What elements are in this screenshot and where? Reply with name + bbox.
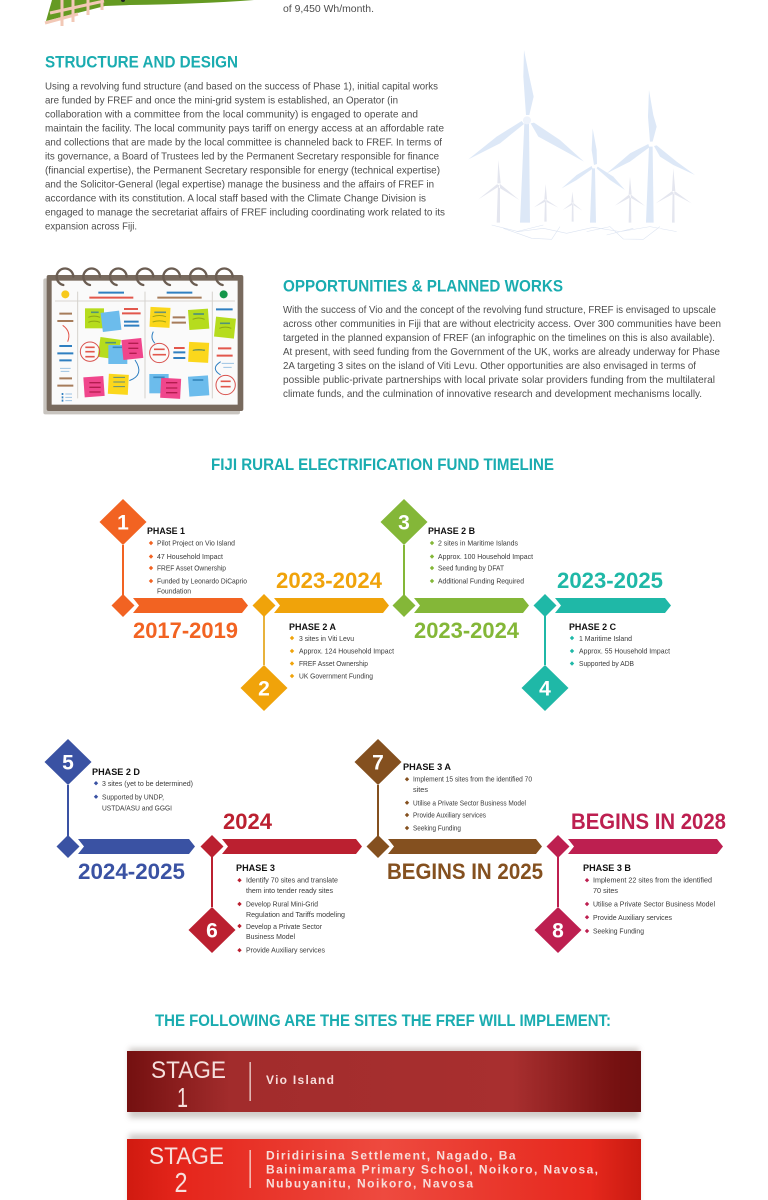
text block: structure and design: maintain the facility. The local community pays tariff on energy access at an affordable rate [45, 124, 444, 134]
heading: structure and design: STRUCTURE AND DESIGN [45, 54, 238, 72]
heading: sites list title: THE FOLLOWING ARE THE SITES THE FREF WILL IMPLEMENT: [155, 1012, 611, 1030]
timeline step 5: Phase 2 D: PHASE 2 D [92, 767, 140, 778]
text block: structure and design: expansion across Fiji. [45, 222, 137, 232]
timeline step 5: Phase 2 D: Supported by UNDP, [102, 792, 164, 802]
timeline step 6: Phase 3: Provide Auxiliary services [246, 946, 325, 954]
timeline step 7: Phase 3 A: Implement 15 sites from the identified 70 [413, 774, 532, 784]
timeline step 3: Phase 2 B: Approx. 100 Household Impact [438, 552, 533, 561]
timeline step 5: Phase 2 D: 3 sites (yet to be determined) [102, 779, 193, 788]
timeline step 6: Phase 3 [188, 809, 362, 954]
text block: structure and design: (financial expertise), the Permanent Secretary responsible for energy (technical expertise) [45, 166, 440, 176]
text block: opportunities and planned works: across other communities in Fiji that are without electricity access. Over 300 communities have been [283, 319, 721, 330]
timeline step 6: Phase 3: Identify 70 sites and translate [246, 876, 338, 884]
timeline step 1: Phase 1: 1 [117, 512, 129, 534]
heading: opportunities and planned works: OPPORTUNITIES & PLANNED WORKS [283, 278, 563, 296]
text block: opportunities and planned works: With the success of Vio and the concept of the revolving fund structure, FREF is envisaged to upscale [283, 305, 716, 316]
timeline step 8: Phase 3 B: 70 sites [593, 886, 618, 895]
timeline step 8: Phase 3 B: Implement 22 sites from the identified [593, 876, 712, 884]
panel: stage 2 [127, 1134, 641, 1200]
text block: opportunities and planned works: 2A targeting 3 sites on the island of Viti Levu. Other opportunities are also envisaged in terms of [283, 361, 696, 372]
timeline step 4: Phase 2 C: PHASE 2 C [569, 622, 616, 633]
timeline step 2: Phase 2 A: PHASE 2 A [289, 622, 336, 633]
panel: stage 2: Nubuyanitu, Noikoro, Navosa [266, 1176, 473, 1190]
timeline step 7: Phase 3 A: Provide Auxiliary services [413, 810, 486, 820]
timeline step 8: Phase 3 B [534, 809, 726, 953]
timeline step 4: Phase 2 C: Supported by ADB [579, 659, 634, 668]
timeline step 5: Phase 2 D [44, 739, 195, 884]
timeline step 6: Phase 3: 6 [206, 920, 218, 942]
text block: structure and design: and collections that are made by the local committee is channeled back to FREF. In terms of [45, 138, 442, 148]
text block: structure and design: engaged to manage the secretariat affairs of FREF including coordinating work related to its [45, 208, 445, 218]
timeline step 6: Phase 3: Regulation and Tariffs modeling [246, 910, 345, 919]
panel: stage 2: STAGE [149, 1143, 224, 1170]
timeline step 4: Phase 2 C: 1 Maritime Island [579, 634, 632, 643]
timeline step 5: Phase 2 D: 2024-2025 [78, 859, 185, 884]
timeline step 8: Phase 3 B: BEGINS IN 2028 [571, 809, 726, 834]
timeline step 4: Phase 2 C: Approx. 55 Household Impact [579, 646, 670, 656]
panel: stage 1: Vio Island [266, 1073, 334, 1087]
illustration: green field and fence fragment [45, 0, 254, 26]
timeline step 1: Phase 1: 47 Household Impact [157, 552, 223, 561]
timeline step 1: Phase 1: FREF Asset Ownership [157, 564, 226, 572]
timeline step 6: Phase 3: 2024 [223, 809, 273, 834]
text block: structure and design [45, 82, 445, 232]
timeline step 3: Phase 2 B: Additional Funding Required [438, 576, 524, 586]
timeline step 2: Phase 2 A [240, 568, 394, 711]
timeline step 7: Phase 3 A [354, 739, 543, 884]
timeline step 2: Phase 2 A: UK Government Funding [299, 672, 373, 680]
timeline step 6: Phase 3: Develop a Private Sector [246, 922, 323, 931]
timeline step 7: Phase 3 A: Seeking Funding [413, 824, 461, 832]
timeline step 1: Phase 1: Foundation [157, 586, 191, 596]
panel: stage 2: Bainimarama Primary School, Noikoro, Navosa, [266, 1162, 598, 1176]
timeline step 3: Phase 2 B: 3 [398, 512, 410, 534]
text block: structure and design: are funded by FREF and once the mini-grid system is established, an Operator (in [45, 96, 398, 106]
timeline step 1: Phase 1 [100, 499, 248, 643]
timeline step 4: Phase 2 C [522, 568, 671, 711]
text block: opportunities and planned works: At present, with seed funding from the Government of the UK, works are already underway for Phase [283, 347, 720, 358]
text block: opportunities and planned works [283, 305, 721, 400]
timeline step 4: Phase 2 C: 4 [539, 678, 551, 700]
timeline step 6: Phase 3: Business Model [246, 932, 295, 941]
timeline step 5: Phase 2 D: 5 [62, 752, 74, 774]
timeline step 6: Phase 3: Develop Rural Mini-Grid [246, 900, 318, 908]
timeline step 2: Phase 2 A: 2 [258, 678, 270, 700]
timeline step 1: Phase 1: Funded by Leonardo DiCaprio [157, 576, 247, 586]
text block: structure and design: its governance, a Board of Trustees led by the Permanent Secretary responsible for finance [45, 152, 439, 162]
text block: structure and design: and the Solicitor-General (legal expertise) manage the business and the affairs of FREF in [45, 180, 434, 190]
timeline step 2: Phase 2 A: 2023-2024 [276, 568, 383, 593]
timeline step 1: Phase 1: 2017-2019 [133, 618, 238, 643]
panel: stage 1 [127, 1048, 641, 1118]
panel: stage 2: 2 [174, 1167, 188, 1198]
timeline step 8: Phase 3 B: PHASE 3 B [583, 863, 631, 874]
panel: stage 1: 1 [177, 1082, 188, 1113]
panel: stage 2: Diridirisina Settlement, Nagado, Ba [266, 1148, 516, 1162]
text block: structure and design: collaboration with a committee from the local community) is engaged to operate and [45, 110, 418, 120]
timeline step 1: Phase 1: Pilot Project on Vio Island [157, 538, 235, 548]
text block: opportunities and planned works: climate funds, and the culmination of innovative research and development mechanisms locally. [283, 389, 702, 400]
timeline step 3: Phase 2 B: 2 sites in Maritime Islands [438, 538, 518, 548]
timeline step 3: Phase 2 B: Seed funding by DFAT [438, 564, 504, 572]
timeline step 8: Phase 3 B: Utilise a Private Sector Business Model [593, 900, 715, 908]
text block: structure and design: Using a revolving fund structure (and based on the success of Phase 1), initial capital works [45, 82, 438, 92]
illustration: kanban calendar board [43, 269, 243, 414]
timeline step 1: Phase 1: PHASE 1 [147, 526, 186, 537]
text block: opportunities and planned works: targeted in the planned expansion of FREF (an infographic on the timelines on this is also available). [283, 333, 715, 344]
timeline step 4: Phase 2 C: 2023-2025 [557, 568, 663, 593]
timeline step 2: Phase 2 A: Approx. 124 Household Impact [299, 646, 394, 656]
timeline step 2: Phase 2 A: FREF Asset Ownership [299, 659, 368, 668]
timeline step 3: Phase 2 B: 2023-2024 [414, 618, 520, 643]
timeline step 8: Phase 3 B: 8 [552, 920, 564, 942]
timeline step 3: Phase 2 B: PHASE 2 B [428, 526, 475, 537]
text: end of intro paragraph: of 9,450 Wh/month. [283, 4, 374, 15]
timeline step 6: Phase 3: them into tender ready sites [246, 886, 333, 895]
heading: timeline title: FIJI RURAL ELECTRIFICATION FUND TIMELINE [211, 456, 554, 474]
text block: opportunities and planned works: possible public-private partnerships with local private solar providers funding from the multilateral [283, 375, 715, 386]
timeline step 8: Phase 3 B: Provide Auxiliary services [593, 913, 672, 922]
panel: stage 1: STAGE [151, 1057, 226, 1084]
timeline step 7: Phase 3 A: BEGINS IN 2025 [387, 859, 543, 884]
timeline step 7: Phase 3 A: 7 [372, 752, 384, 774]
timeline step 2: Phase 2 A: 3 sites in Viti Levu [299, 634, 354, 643]
illustration: wind turbines [468, 50, 695, 239]
timeline step 8: Phase 3 B: Seeking Funding [593, 926, 644, 936]
timeline step 7: Phase 3 A: PHASE 3 A [403, 762, 451, 773]
timeline step 7: Phase 3 A: sites [413, 785, 428, 794]
timeline step 6: Phase 3: PHASE 3 [236, 863, 275, 874]
timeline step 7: Phase 3 A: Utilise a Private Sector Business Model [413, 798, 526, 808]
timeline step 3: Phase 2 B [380, 499, 533, 643]
timeline step 5: Phase 2 D: USTDA/ASU and GGGI [102, 804, 172, 812]
text block: structure and design: accordance with its constitution. A local staff based with the Climate Change Division is [45, 194, 426, 204]
